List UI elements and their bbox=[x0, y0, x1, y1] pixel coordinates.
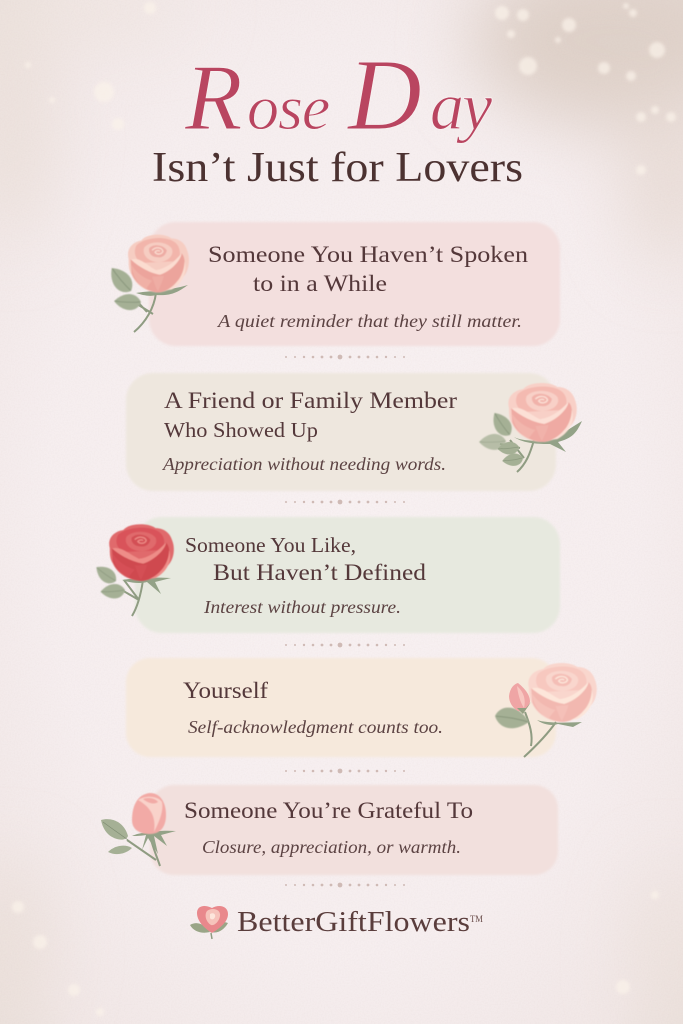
title: Rose Day: D bbox=[346, 39, 422, 152]
icon: pink rose with bud bbox=[493, 663, 597, 757]
divider bbox=[285, 883, 405, 887]
panel: someone you like bbox=[92, 517, 560, 633]
flower bud bbox=[509, 683, 531, 714]
title: Rose Day: R bbox=[184, 46, 242, 150]
heading: Someone You Haven’t Spoken bbox=[208, 242, 529, 267]
card background bbox=[126, 658, 556, 757]
wordmark: BetterGiftFlowers bbox=[237, 907, 470, 938]
description: Appreciation without needing words. bbox=[162, 454, 446, 474]
heading: A Friend or Family Member bbox=[164, 388, 457, 413]
icon: rose bud bbox=[101, 793, 176, 866]
title: Rose Day: ose bbox=[247, 72, 329, 143]
description: A quiet reminder that they still matter. bbox=[217, 311, 522, 331]
panel: someone you're grateful to bbox=[101, 785, 558, 875]
panel: yourself bbox=[126, 658, 597, 757]
title: Rose Day: ay bbox=[430, 68, 493, 144]
heading: Someone You Like, bbox=[185, 533, 356, 557]
icon: red rose bbox=[92, 524, 174, 616]
description: Self-acknowledgment counts too. bbox=[188, 717, 443, 737]
icon: heart rose bbox=[190, 906, 228, 939]
icon: pink rose bbox=[479, 383, 582, 472]
panel: friend or family member bbox=[126, 373, 582, 491]
heading line two: to in a While bbox=[253, 271, 387, 296]
card background bbox=[135, 517, 560, 633]
heading line two: Who Showed Up bbox=[164, 418, 318, 442]
card background bbox=[150, 785, 558, 875]
description: Closure, appreciation, or warmth. bbox=[202, 837, 461, 857]
heading: Someone You’re Grateful To bbox=[184, 798, 473, 823]
card background bbox=[149, 222, 560, 346]
icon: pink rose bbox=[105, 235, 189, 332]
divider bbox=[285, 500, 405, 504]
trademark: TM bbox=[470, 914, 483, 924]
heading: Yourself bbox=[183, 678, 268, 703]
description: Interest without pressure. bbox=[203, 597, 401, 617]
panel: someone you haven't spoken to bbox=[105, 222, 560, 346]
divider bbox=[285, 355, 405, 359]
subtitle: Isn’t Just for Lovers bbox=[152, 145, 523, 191]
divider bbox=[285, 769, 405, 773]
heading line two: But Haven’t Defined bbox=[213, 560, 427, 585]
title bbox=[152, 39, 523, 191]
logo bbox=[190, 906, 483, 939]
divider bbox=[285, 643, 405, 647]
card background bbox=[126, 373, 556, 491]
